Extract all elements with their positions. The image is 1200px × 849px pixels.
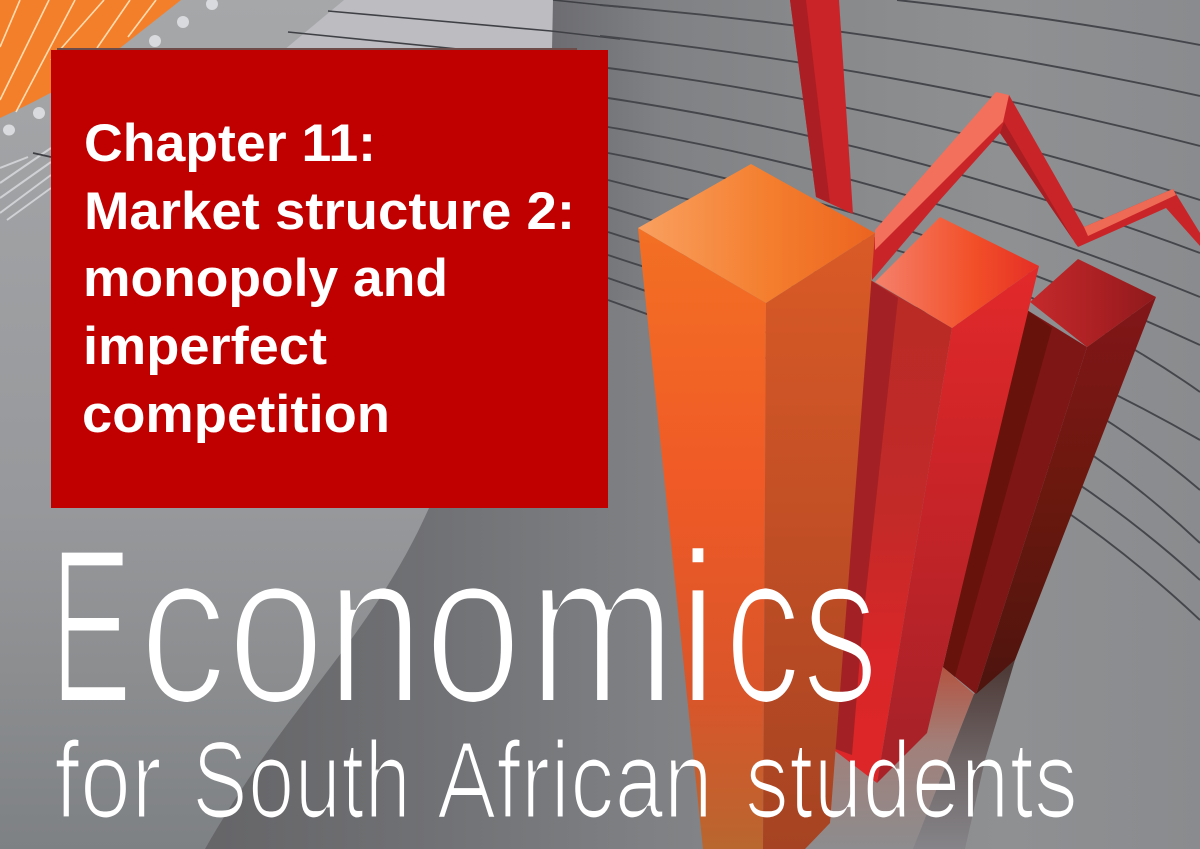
chapter title: monopoly and [83, 249, 448, 308]
chapter title: Market structure 2: [84, 182, 575, 241]
chapter title: imperfect [83, 317, 327, 376]
chapter title: Chapter 11: [84, 114, 376, 173]
book subtitle: for [54, 719, 162, 840]
book title: Economics: E [49, 503, 133, 749]
book title: Economics: cs [724, 507, 879, 748]
book title: Economics: co [139, 507, 325, 748]
chart: red bar [830, 217, 1039, 783]
book title: Economics: m [528, 507, 676, 748]
chart: zigzag trend line [872, 92, 1200, 280]
book subtitle: South [192, 719, 411, 840]
chart: orange bar [638, 164, 875, 849]
book title: Economics: no [326, 507, 522, 748]
book subtitle: African [437, 719, 713, 840]
decoration: dots [3, 0, 218, 136]
chart: rising red arrow stem [790, 0, 853, 214]
book title: Economics: i [678, 507, 718, 748]
chart: bar shadows [805, 660, 1015, 849]
book subtitle: students [745, 719, 1078, 840]
chapter title: competition [82, 385, 390, 444]
curved chart grid lines [600, 0, 1200, 620]
decoration: orange striped corner [0, 0, 181, 118]
red title panel [51, 48, 608, 508]
chart: dark red bar [943, 259, 1156, 694]
decoration: pale hatching and lines upper left [0, 0, 620, 220]
